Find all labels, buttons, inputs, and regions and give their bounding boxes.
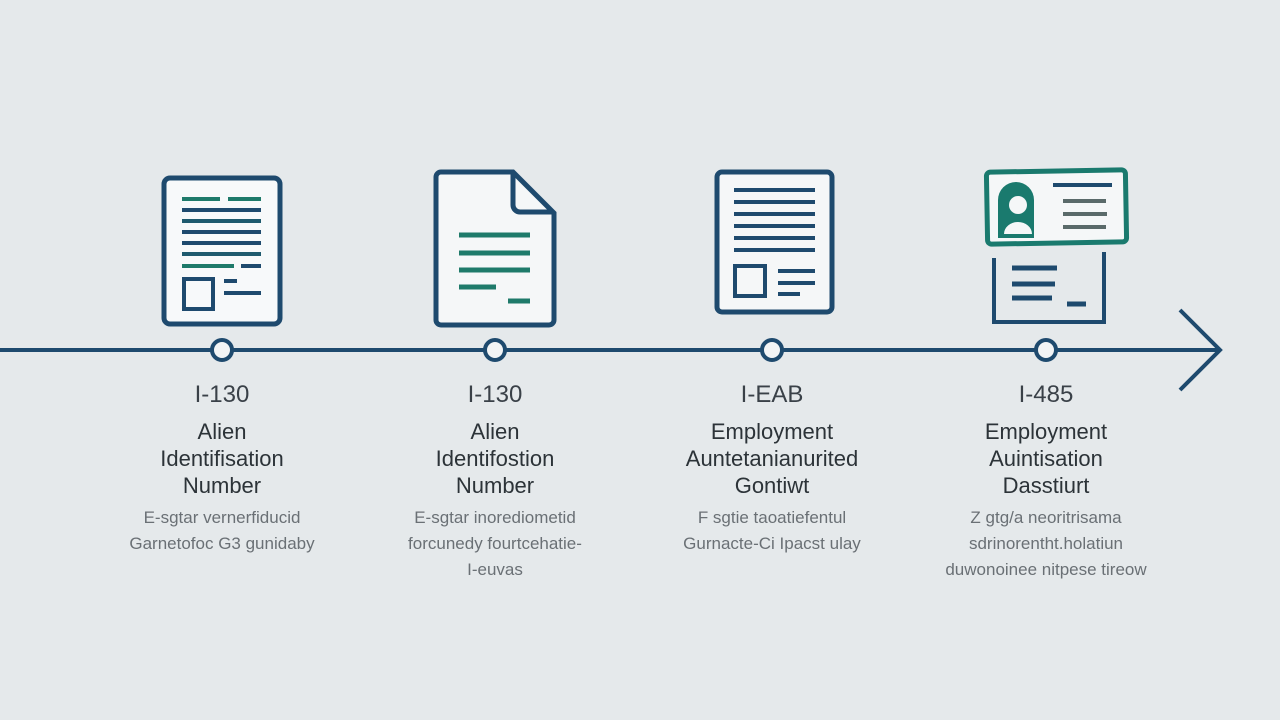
step 2 text: E-sgtar inorediometid	[414, 508, 576, 527]
step 4 text: Employment	[985, 419, 1107, 444]
step 2 text: forcunedy fourtcehatie-	[408, 534, 582, 553]
markers	[212, 340, 1056, 360]
step 2 text	[408, 381, 582, 579]
step 1 text: I-130	[195, 381, 249, 408]
step 1 text	[129, 381, 315, 553]
timeline line	[0, 310, 1220, 390]
step 4 text	[945, 381, 1147, 579]
step 2 text: Number	[456, 473, 534, 498]
step 3 text: Employment	[711, 419, 833, 444]
step 4 text: duwonoinee nitpese tireow	[945, 560, 1147, 579]
step 4 text: Dasstiurt	[1003, 473, 1089, 498]
step 2 text: I-130	[468, 381, 522, 408]
step 3 text: I-EAB	[741, 381, 803, 408]
step 3 text: Gurnacte-Ci Ipacst ulay	[683, 534, 861, 553]
step 3 text: Auntetanianurited	[686, 446, 858, 471]
step 4 text: I-485	[1019, 381, 1073, 408]
step 3 text: Gontiwt	[735, 473, 809, 498]
icon: document 2	[436, 172, 554, 325]
step 1 text: Garnetofoc G3 gunidaby	[129, 534, 315, 553]
icon: document 3	[717, 172, 832, 312]
step 2 text: Identifostion	[436, 446, 554, 471]
icon: document 1	[164, 178, 280, 324]
step 3 text	[683, 381, 861, 553]
step 3 text: F sgtie taoatiefentul	[698, 508, 846, 527]
icon: ID card	[986, 170, 1127, 322]
step 1 text: Identifisation	[160, 446, 284, 471]
step 1 text: Number	[183, 473, 261, 498]
step 1 text: E-sgtar vernerfiducid	[144, 508, 300, 527]
step 4 text: sdrinorentht.holatiun	[969, 534, 1123, 553]
step 4 text: Auintisation	[989, 446, 1103, 471]
step 4 text: Z gtg/a neoritrisama	[970, 508, 1122, 527]
step 1 text: Alien	[198, 419, 246, 444]
step 2 text: I-euvas	[467, 560, 523, 579]
step 2 text: Alien	[471, 419, 519, 444]
